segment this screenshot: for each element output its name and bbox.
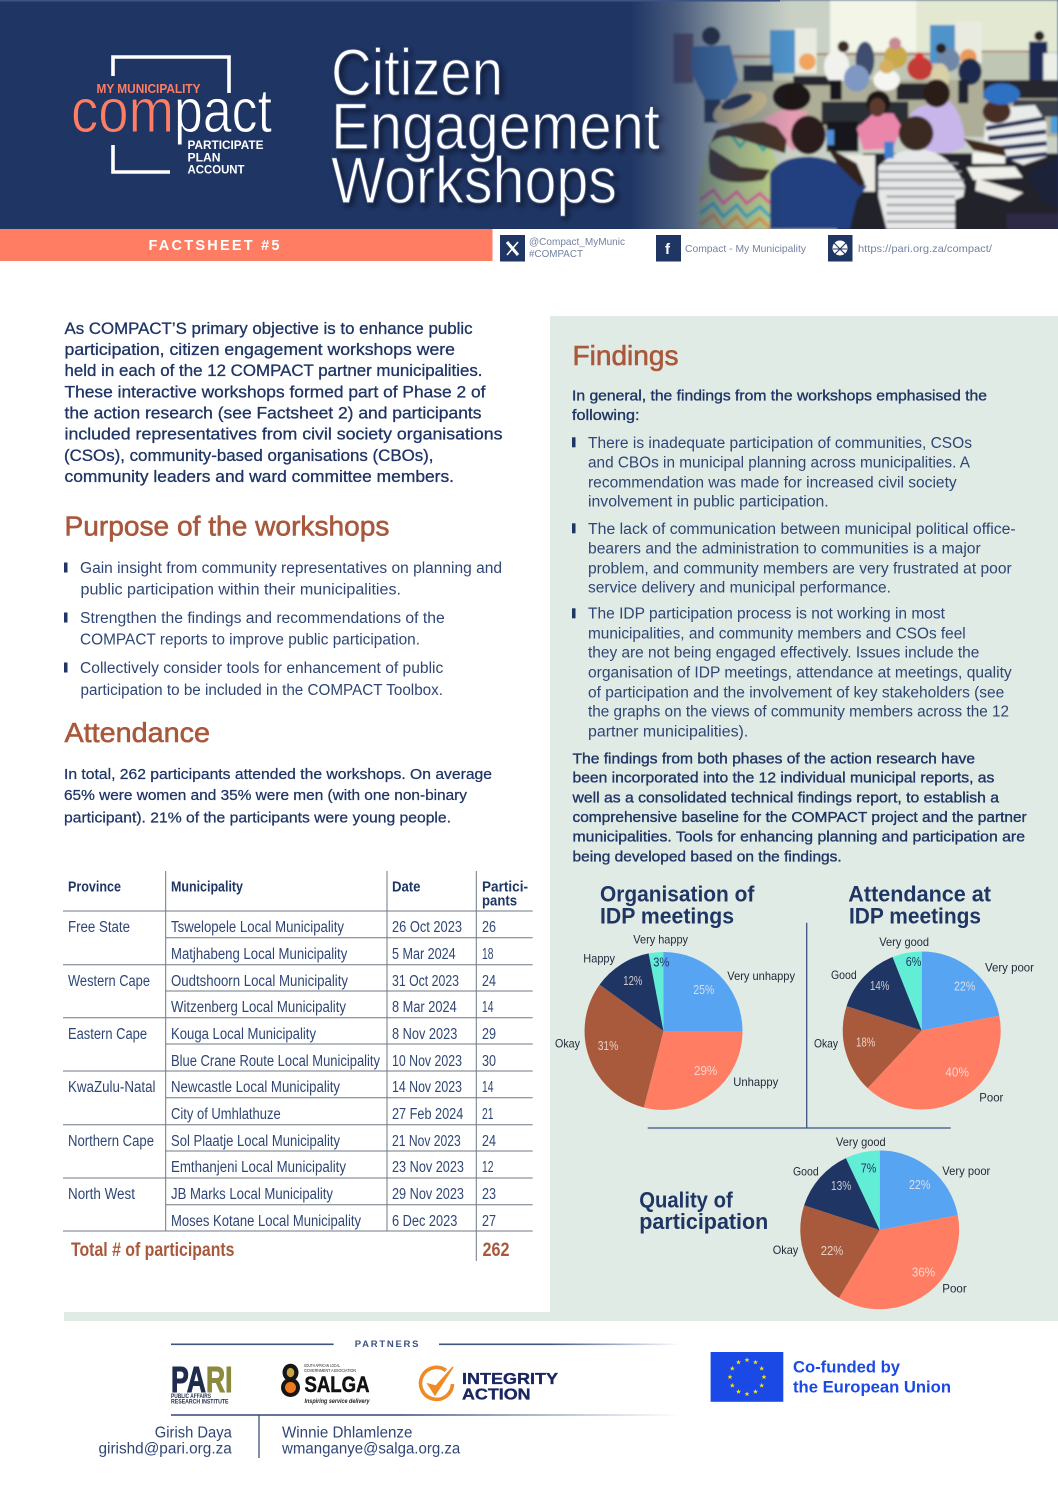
title: [331, 35, 660, 217]
factsheet bar: [0, 229, 492, 261]
chart title: Organisation of: [600, 882, 755, 907]
pie labels: Poor: [942, 1282, 967, 1296]
date column: 23 Nov 2023: [392, 1159, 464, 1176]
pie labels: Okay: [773, 1243, 798, 1257]
Facebook name: Compact - My Municipality: [685, 243, 807, 255]
findings list: bearers and the administration to communities is a major: [588, 540, 981, 557]
logo: My Municipality Compact: MY MUNICIPALITY: [96, 81, 201, 96]
pie labels: Very poor: [942, 1164, 990, 1178]
logo: My Municipality Compact: PARTICIPATE: [188, 138, 264, 152]
municipality column: Sol Plaatje Local Municipality: [171, 1133, 340, 1150]
province column: Free State: [68, 919, 130, 936]
municipality column: Tswelopele Local Municipality: [171, 919, 344, 936]
findings list: service delivery and municipal performance.: [588, 579, 891, 596]
chart: organisation of IDP meetings: [555, 882, 795, 1110]
province column: Western Cape: [68, 973, 150, 990]
pie labels: 13%: [831, 1179, 851, 1193]
pie labels: 7%: [861, 1161, 876, 1175]
pie labels: 3%: [653, 956, 669, 970]
table header: [68, 880, 528, 910]
province column: Eastern Cape: [68, 1026, 147, 1043]
pie labels: [773, 1135, 990, 1296]
table total: 262: [482, 1240, 510, 1261]
municipality column: City of Umhlathuze: [171, 1106, 281, 1123]
findings list: organisation of IDP meetings, attendance at meetings, quality: [588, 665, 1012, 682]
province column: Northern Cape: [68, 1133, 154, 1150]
intro text: [64, 320, 503, 486]
date column: 29 Nov 2023: [392, 1186, 464, 1203]
pie labels: [555, 932, 795, 1089]
pie labels: Good: [793, 1165, 819, 1179]
date column: [392, 919, 464, 1230]
date column: 10 Nov 2023: [392, 1053, 462, 1070]
pie labels: 31%: [598, 1039, 618, 1053]
pie labels: Very poor: [985, 961, 1034, 975]
logo: PARI: PA: [171, 1359, 206, 1400]
findings conclusion: [571, 750, 1027, 866]
contact: Winnie Dhlamlenze: Winnie Dhlamlenze: [282, 1424, 412, 1442]
province column: [68, 919, 156, 1203]
logo: PARI: RI: [206, 1359, 232, 1400]
pie slices: [585, 952, 742, 1110]
chart title: [639, 1188, 768, 1234]
table total: Total # of participants: [71, 1240, 234, 1261]
pie labels: 6%: [906, 955, 921, 969]
social links: [500, 235, 992, 262]
pie slices: [843, 951, 1001, 1110]
findings conclusion: The findings from both phases of the action research have: [572, 750, 975, 767]
table header: Partici-: [482, 880, 528, 896]
title: Engagement: [331, 89, 660, 163]
intro text: included representatives from civil society organisations: [64, 426, 503, 444]
province column: North West: [68, 1186, 136, 1203]
logo: co-funded by the European Union: the European Union: [793, 1378, 951, 1397]
findings intro: [572, 388, 987, 424]
logo: PARI: RESEARCH INSTITUTE: [171, 1400, 228, 1406]
findings conclusion: being developed based on the findings.: [572, 849, 842, 866]
date column: 26 Oct 2023: [392, 919, 462, 936]
date column: 5 Mar 2024: [392, 946, 456, 963]
pie labels: 36%: [912, 1266, 935, 1280]
findings list: partner municipalities).: [588, 724, 748, 741]
pie labels: Unhappy: [733, 1075, 778, 1089]
municipality column: Matjhabeng Local Municipality: [171, 946, 348, 963]
participants column: 24: [482, 973, 496, 990]
icon: X: [500, 235, 525, 262]
icon: Facebook: f: [665, 241, 671, 258]
logo: SALGA: SOUTH AFRICAN LOCAL: [304, 1363, 340, 1368]
heading: attendance: Attendance: [64, 717, 210, 748]
contact: Winnie Dhlamlenze: [281, 1424, 461, 1458]
pie labels: Okay: [555, 1037, 580, 1051]
partners label: PARTNERS: [355, 1339, 418, 1350]
findings conclusion: municipalities. Tools for enhancing planning and participation are: [572, 829, 1025, 846]
purpose list: public participation within their municipalities.: [80, 582, 401, 598]
pie labels: Very unhappy: [727, 969, 795, 983]
icon: EU stars: [728, 1357, 766, 1396]
participants column: 30: [482, 1053, 496, 1070]
X handle: [529, 236, 625, 260]
intro text: As COMPACT’S primary objective is to enhance public: [64, 320, 472, 338]
findings list: problem, and community members are very frustrated at poor: [588, 560, 1012, 577]
participants column: 14: [482, 999, 494, 1016]
date column: 31 Oct 2023: [392, 973, 459, 990]
purpose list: [64, 560, 502, 699]
logo: PARI: [171, 1359, 232, 1406]
panel: findings background: [64, 316, 1058, 1321]
municipality column: Newcastle Local Municipality: [171, 1079, 340, 1096]
participants column: 23: [482, 1186, 496, 1203]
logo: Integrity Action: INTEGRITY: [462, 1371, 558, 1388]
findings conclusion: been incorporated into the 12 individual municipal reports, as: [572, 770, 995, 787]
participants column: 14: [482, 1079, 494, 1096]
contact: Girish Daya: Girish Daya: [155, 1424, 232, 1442]
logo: SALGA: [281, 1363, 370, 1405]
municipality column: Emthanjeni Local Municipality: [171, 1159, 346, 1176]
attendance text: [64, 767, 492, 826]
chart: attendance at IDP meetings: [814, 882, 1034, 1110]
municipality column: JB Marks Local Municipality: [171, 1186, 333, 1203]
chart title: participation: [639, 1209, 768, 1234]
pie labels: Poor: [979, 1091, 1003, 1105]
findings list: they are not being engaged effectively. Issues include the: [588, 645, 979, 662]
findings list: recommendation was made for increased civil society: [588, 474, 957, 491]
participants column: 24: [482, 1133, 496, 1150]
pie labels: Good: [831, 968, 857, 982]
findings list: The lack of communication between municipal political office-: [588, 521, 1016, 538]
contact: Girish Daya: girishd@pari.org.za: [98, 1440, 232, 1458]
table: workshops by municipality: [63, 871, 533, 1261]
factsheet bar: FACTSHEET #5: [148, 238, 280, 254]
table header: pants: [482, 894, 517, 910]
logo: My Municipality Compact: ACCOUNT: [188, 162, 245, 176]
purpose list: Strengthen the findings and recommendations of the: [80, 610, 445, 627]
date column: 8 Mar 2024: [392, 999, 457, 1016]
findings intro: following:: [572, 407, 640, 424]
participants column: 26: [482, 919, 496, 936]
findings intro: In general, the findings from the workshops emphasised the: [572, 388, 987, 405]
chart title: Quality of: [639, 1188, 733, 1212]
pie labels: Okay: [814, 1037, 838, 1051]
findings list: of participation and the involvement of key stakeholders (see: [588, 685, 1004, 702]
logo: SALGA: SALGA: [304, 1372, 370, 1397]
pie labels: 22%: [821, 1244, 843, 1258]
title: Citizen: [331, 35, 503, 109]
table header: Municipality: [171, 880, 243, 896]
municipality column: Kouga Local Municipality: [171, 1026, 316, 1043]
findings list: the graphs on the views of community members across the 12: [588, 704, 1009, 721]
title: Workshops: [331, 143, 617, 217]
purpose list: Collectively consider tools for enhancement of public: [80, 660, 444, 677]
logo: My Municipality Compact: PLAN: [188, 150, 220, 164]
logo: PARI: PUBLIC AFFAIRS: [171, 1394, 211, 1400]
logo: SALGA: Inspiring service delivery: [304, 1398, 370, 1405]
findings conclusion: comprehensive baseline for the COMPACT project and the partner: [572, 809, 1027, 826]
purpose list: Gain insight from community representatives on planning and: [80, 560, 502, 577]
icon: web: [828, 235, 852, 262]
logo: co-funded by the European Union: Co-funded by: [793, 1357, 901, 1376]
participants column: 18: [482, 946, 494, 963]
municipality column: Moses Kotane Local Municipality: [171, 1213, 361, 1230]
attendance text: In total, 262 participants attended the workshops. On average: [64, 767, 492, 783]
intro text: (CSOs), community-based organisations (CBOs),: [64, 447, 434, 465]
pie slices: [800, 1150, 959, 1309]
participants column: 21: [482, 1106, 494, 1123]
findings list: The IDP participation process is not working in most: [588, 605, 946, 622]
participants column: 27: [482, 1213, 496, 1230]
partners section: [171, 1339, 680, 1416]
municipality column: Blue Crane Route Local Municipality: [171, 1053, 380, 1070]
logo: My Municipality Compact: [71, 57, 272, 176]
findings list: involvement in public participation.: [588, 493, 829, 510]
province column: KwaZulu-Natal: [68, 1079, 156, 1096]
logo: My Municipality Compact: com: [71, 77, 174, 146]
pie labels: 40%: [945, 1066, 969, 1080]
intro text: participation, citizen engagement workshops were: [64, 341, 455, 359]
findings list: municipalities, and community members and CSOs feel: [588, 625, 966, 642]
municipality column: Oudtshoorn Local Municipality: [171, 973, 348, 990]
header banner: [0, 0, 1058, 230]
pie labels: Very happy: [633, 932, 688, 946]
municipality column: Witzenberg Local Municipality: [171, 999, 346, 1016]
chart title: IDP meetings: [849, 904, 981, 928]
findings list: [572, 435, 1016, 741]
findings list: and CBOs in municipal planning across municipalities. A: [588, 454, 971, 471]
chart: quality of participation: [639, 1135, 990, 1309]
X handle: @Compact_MyMunic: [529, 236, 625, 248]
logo: Integrity Action: ACTION: [462, 1387, 531, 1404]
pie labels: 29%: [694, 1064, 717, 1078]
logo: SALGA: GOVERNMENT ASSOCIATION: [304, 1368, 356, 1373]
participants column: 29: [482, 1026, 496, 1043]
pie labels: 25%: [693, 983, 714, 997]
pie labels: 12%: [623, 974, 642, 988]
logo: Integrity Action: [421, 1367, 558, 1404]
pie labels: Very good: [879, 935, 929, 949]
chart title: IDP meetings: [600, 904, 734, 928]
icon: Facebook: [656, 235, 681, 262]
X handle: #COMPACT: [529, 248, 584, 260]
participants column: 12: [482, 1159, 494, 1176]
pie labels: 22%: [909, 1178, 930, 1192]
chart title: Attendance at: [848, 882, 992, 907]
table total: [71, 1240, 510, 1261]
pie labels: 14%: [870, 979, 889, 993]
pie labels: [814, 935, 1034, 1105]
intro text: These interactive workshops formed part of Phase 2 of: [64, 384, 486, 402]
pie labels: Happy: [583, 952, 615, 966]
workshop photo: [630, 0, 1058, 230]
website: https://pari.org.za/compact/: [858, 243, 992, 255]
intro text: held in each of the 12 COMPACT partner municipalities.: [64, 362, 482, 380]
chart title: [848, 882, 992, 928]
chart dividers: [648, 923, 951, 1128]
date column: 14 Nov 2023: [392, 1079, 462, 1096]
contact: Girish Daya: [98, 1424, 232, 1458]
pie labels: 18%: [856, 1036, 875, 1050]
chart title: [600, 882, 755, 928]
table header: Date: [392, 880, 420, 896]
date column: 8 Nov 2023: [392, 1026, 457, 1043]
municipality column: [171, 919, 380, 1230]
attendance text: 65% were women and 35% were men (with one non-binary: [64, 788, 468, 804]
participants column: [482, 919, 496, 1230]
purpose list: COMPACT reports to improve public participation.: [80, 632, 420, 648]
attendance text: participant). 21% of the participants were young people.: [64, 810, 451, 826]
intro text: the action research (see Factsheet 2) and participants: [64, 404, 482, 422]
logo: My Municipality Compact: pact: [174, 77, 272, 146]
contact: Winnie Dhlamlenze: wmanganye@salga.org.za: [281, 1440, 461, 1458]
intro text: community leaders and ward committee members.: [64, 468, 454, 486]
pie labels: 22%: [954, 980, 975, 994]
heading: purpose: Purpose of the workshops: [64, 510, 389, 542]
findings list: There is inadequate participation of communities, CSOs: [588, 435, 972, 452]
findings conclusion: well as a consolidated technical findings report, to establish a: [571, 790, 1000, 807]
table header: Province: [68, 880, 121, 896]
logo: co-funded by the European Union: [711, 1352, 951, 1402]
pie labels: Very good: [836, 1135, 886, 1149]
date column: 21 Nov 2023: [392, 1133, 461, 1150]
heading: findings: Findings: [572, 340, 678, 371]
date column: 6 Dec 2023: [392, 1213, 457, 1230]
date column: 27 Feb 2024: [392, 1106, 464, 1123]
purpose list: participation to be included in the COMPACT Toolbox.: [80, 682, 443, 699]
contacts: [98, 1415, 461, 1458]
